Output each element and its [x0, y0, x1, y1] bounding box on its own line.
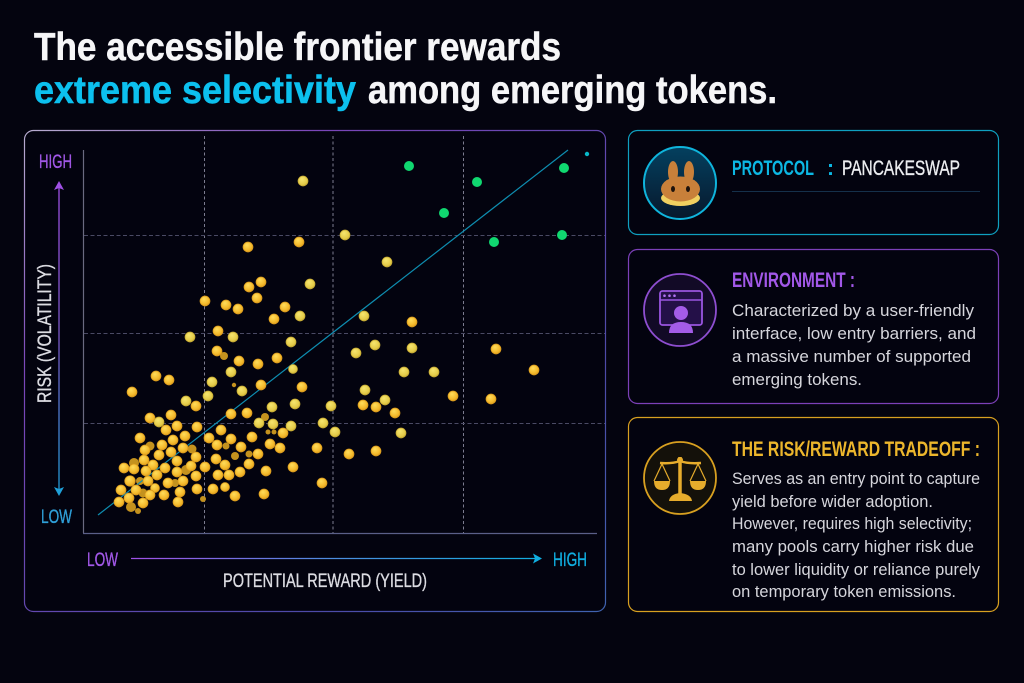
environment heading: ENVIRONMENT : [732, 269, 855, 292]
environment body: Characterized by a user-friendly [732, 302, 975, 320]
colon: : [827, 157, 834, 180]
y axis label high: HIGH [39, 152, 72, 173]
panel: environment [628, 250, 998, 404]
icon: balance scales [644, 442, 716, 514]
environment body: emerging tokens. [732, 371, 862, 389]
protocol name: PANCAKESWAP [842, 157, 960, 180]
title [34, 26, 777, 112]
dots: gold token cluster [114, 237, 539, 508]
y axis title: RISK (VOLATILITY) [35, 264, 56, 403]
tradeoff body: Serves as an entry point to capture [732, 470, 980, 488]
arrow: risk axis [54, 181, 64, 496]
x axis title: POTENTIAL REWARD (YIELD) [223, 571, 427, 592]
panel: risk/reward tradeoff [628, 418, 998, 612]
environment body: a massive number of supported [732, 348, 971, 366]
icon: pancake bunny [644, 147, 716, 219]
tradeoff body: on temporary token emissions. [732, 583, 956, 601]
environment body [732, 302, 976, 389]
title: among emerging tokens. [368, 69, 777, 112]
title: extreme selectivity [34, 69, 357, 112]
tradeoff body: yield before wider adoption. [732, 493, 933, 511]
dots: pale yellow tokens [154, 176, 439, 438]
tradeoff body: However, requires high selectivity; [732, 515, 972, 533]
panel: scatter chart [24, 130, 606, 612]
environment body: interface, low entry barriers, and [732, 325, 976, 343]
trend line [98, 150, 568, 515]
x axis label high: HIGH [553, 550, 587, 571]
dots: partially hidden tokens [126, 352, 276, 514]
protocol label: PROTOCOL [732, 157, 814, 180]
y axis label low: LOW [41, 507, 72, 528]
x axis label low: LOW [87, 550, 118, 571]
dots: green winners [404, 152, 589, 247]
chart grid [83, 136, 605, 534]
arrow: reward axis [131, 554, 542, 564]
title: The accessible frontier rewards [34, 26, 561, 69]
tradeoff body: to lower liquidity or reliance purely [732, 561, 981, 579]
tradeoff body: many pools carry higher risk due [732, 538, 974, 556]
panel: protocol [628, 130, 998, 234]
icon: user interface [644, 274, 716, 346]
tradeoff body [732, 470, 981, 601]
